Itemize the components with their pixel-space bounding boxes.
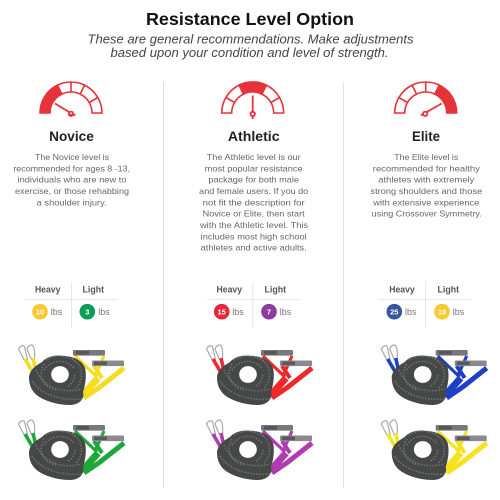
- text: elite description: The Elite level is: [394, 152, 458, 162]
- text: elite description: recommended for healthy: [373, 164, 481, 174]
- table: novice weights: lbs: [51, 307, 63, 317]
- image: blue resistance band: [381, 345, 487, 405]
- heading: elite: Elite: [412, 128, 440, 144]
- icon: elite gauge: [395, 82, 457, 116]
- text: athletic description: includes most high school: [201, 231, 307, 241]
- text: athletic description: The Athletic level is our: [207, 152, 301, 162]
- table: elite weights: 10: [438, 307, 446, 316]
- image: purple resistance band: [206, 420, 312, 480]
- table: athletic weights: lbs: [232, 307, 244, 317]
- table: elite weights: [379, 282, 472, 328]
- text: athletic description: Novice or Elite, then start: [203, 209, 305, 219]
- table: elite weights: Light: [438, 285, 459, 295]
- table: novice weights: lbs: [98, 307, 110, 317]
- image: yellow resistance band: [381, 420, 487, 480]
- text: athletic description: and female users. If you do: [199, 186, 309, 196]
- text: athletic description: athletes and active adults.: [201, 243, 307, 253]
- table: elite weights: lbs: [405, 307, 417, 317]
- icon: athletic gauge: [222, 82, 284, 119]
- text: athletic description: most popular resistance: [205, 164, 303, 174]
- table: athletic weights: Light: [265, 285, 286, 295]
- table: elite weights: Heavy: [389, 285, 415, 295]
- table: athletic weights: 15: [218, 307, 226, 316]
- table: novice weights: [24, 282, 117, 328]
- text: elite description: athletes with extremely: [378, 175, 475, 185]
- heading: athletic: Athletic: [228, 128, 280, 144]
- image: yellow resistance band: [18, 345, 124, 405]
- heading: novice: Novice: [49, 128, 94, 144]
- table: athletic weights: Heavy: [217, 285, 242, 295]
- text: athletic description: with the Athletic level. This: [199, 220, 308, 230]
- table: elite weights: lbs: [453, 307, 465, 317]
- subtitle: based upon your condition and level of strength.: [110, 46, 388, 60]
- text: novice description: The Novice level is: [35, 152, 109, 162]
- panel: novice: [13, 82, 130, 480]
- table: novice weights: Heavy: [35, 285, 60, 295]
- table: novice weights: 10: [36, 307, 44, 316]
- table: athletic weights: [207, 282, 299, 328]
- text: novice description: individuals who are new to: [18, 175, 127, 185]
- text: elite description: [370, 152, 483, 219]
- image: red resistance band: [206, 345, 312, 405]
- text: athletic description: [199, 152, 309, 253]
- text: elite description: with extensive experience: [372, 197, 480, 207]
- table: elite weights: 25: [390, 307, 398, 316]
- subtitle: These are general recommendations. Make adjustments: [88, 32, 413, 46]
- text: novice description: exercise, or those rehabbing: [15, 186, 129, 196]
- text: elite description: strong shoulders and those: [370, 186, 483, 196]
- table: novice weights: 3: [85, 307, 89, 316]
- image: green resistance band: [18, 420, 124, 480]
- title: Resistance Level Option: [146, 9, 354, 29]
- table: athletic weights: 7: [267, 307, 271, 316]
- panel: elite: [370, 82, 487, 480]
- panel: athletic: [199, 82, 312, 480]
- table: athletic weights: lbs: [280, 307, 292, 317]
- subtitle: [88, 32, 413, 60]
- text: novice description: [13, 152, 130, 207]
- table: novice weights: Light: [83, 285, 104, 295]
- text: novice description: a shoulder injury.: [37, 197, 107, 207]
- icon: novice gauge: [40, 82, 102, 116]
- text: athletic description: package for both male: [208, 175, 299, 185]
- text: elite description: using Crossover Symmetry.: [372, 209, 482, 219]
- text: athletic description: not fit the description for: [203, 197, 305, 207]
- text: novice description: recommended for ages 8 -13,: [13, 164, 130, 174]
